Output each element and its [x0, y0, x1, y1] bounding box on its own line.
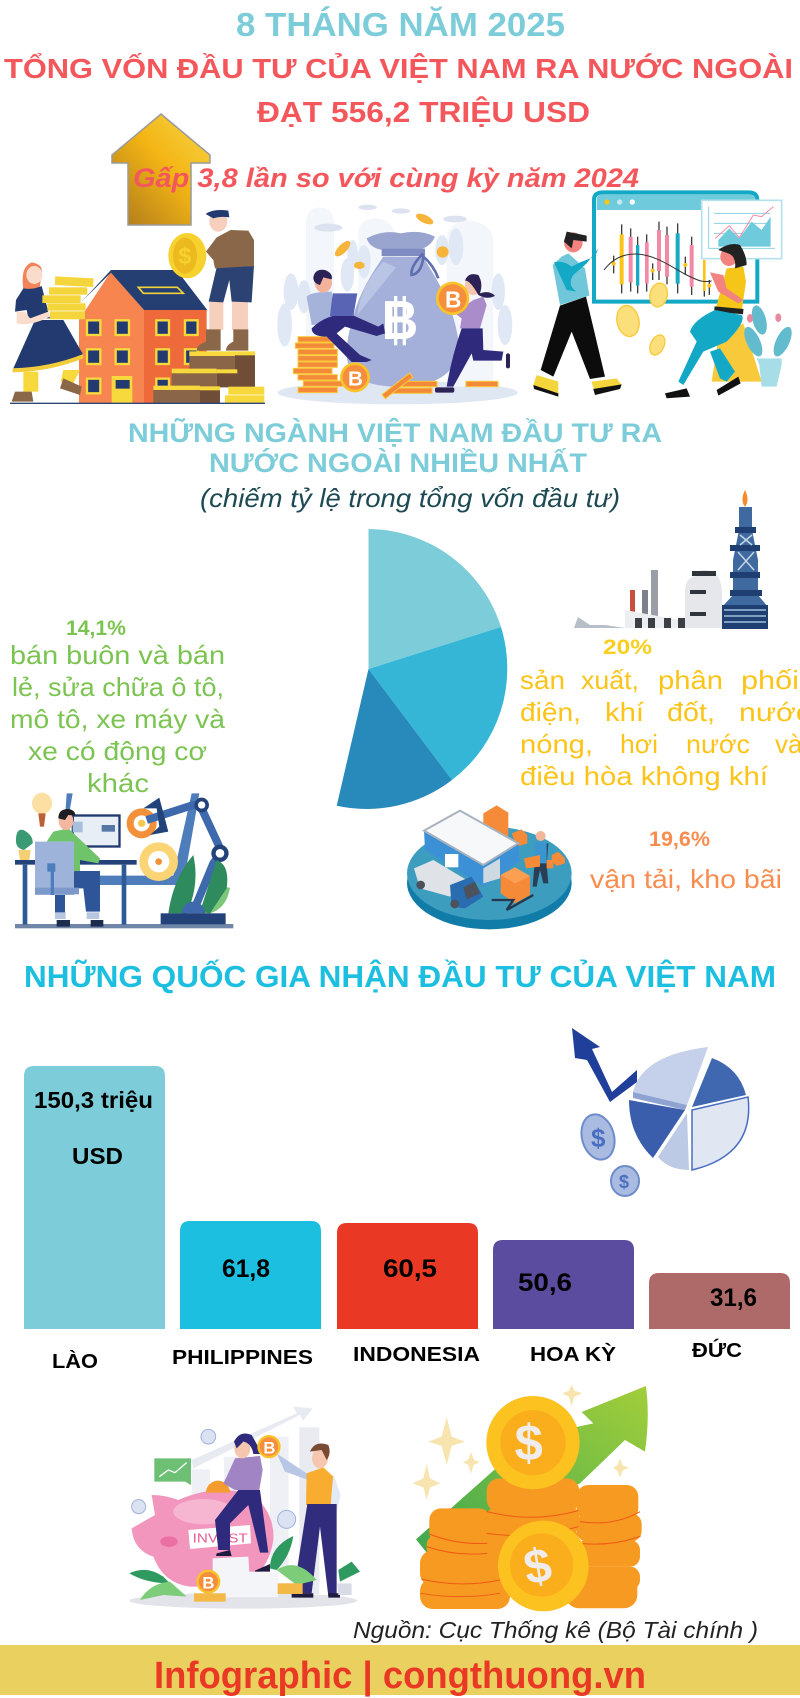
bar: Lào: USD [72, 1143, 123, 1169]
illustration: refinery and oil rig [574, 490, 768, 629]
icon: pie chart with arrow and coins: $ [619, 1172, 629, 1192]
bar: Indonesia [337, 1223, 480, 1366]
bar: Philippines [172, 1221, 321, 1369]
callout: electricity and gas 20%: sản [520, 665, 565, 695]
illustration: bitcoin money bag: B [445, 286, 461, 312]
bar: Hoa Kỳ: 50,6 [518, 1269, 572, 1297]
callout: electricity and gas 20% [520, 636, 800, 791]
callout: trade and vehicle repair 14,1%: lẻ, sửa chữa ô tô, [12, 672, 224, 702]
bar: Hoa Kỳ [493, 1240, 634, 1366]
callout: trade and vehicle repair 14,1%: mô tô, xe máy và [10, 704, 226, 734]
title: main line: TỔNG VỐN ĐẦU TƯ CỦA VIỆT NAM RA NƯỚC NGOÀI [4, 52, 793, 84]
callout: trade and vehicle repair 14,1%: bán buôn và bán [10, 640, 225, 670]
title: total value: ĐẠT 556,2 TRIỆU USD [257, 95, 590, 129]
bar: Philippines: PHILIPPINES [172, 1347, 313, 1369]
bar: Đức: 31,6 [710, 1284, 757, 1312]
illustration: people and candlestick chart [533, 192, 795, 398]
section heading: industries [128, 417, 662, 513]
illustration: house and coins: $ [178, 243, 191, 269]
illustration: bitcoin money bag: B [348, 367, 363, 390]
heading line two: NƯỚC NGOÀI NHIỀU NHẤT [209, 447, 588, 478]
callout: trade and vehicle repair 14,1%: khác [87, 768, 149, 798]
callout: electricity and gas 20%: xuất, [581, 665, 639, 695]
callout: trade and vehicle repair 14,1%: xe có động cơ [28, 736, 207, 766]
callout: electricity and gas 20%: khí [605, 697, 645, 727]
illustration: gold coin stacks and green arrow: $ [515, 1414, 543, 1471]
title: period: 8 THÁNG NĂM 2025 [236, 6, 565, 43]
callout: trade and vehicle repair 14,1%: 14,1% [66, 617, 126, 640]
illustration: gold coin stacks and green arrow [413, 1385, 648, 1611]
callout: electricity and gas 20%: phân [658, 665, 723, 695]
bar: Indonesia: INDONESIA [353, 1344, 480, 1366]
callout: electricity and gas 20%: nước [686, 729, 750, 759]
bar: Đức [649, 1273, 790, 1362]
callout: electricity and gas 20%: phối [741, 665, 799, 695]
bar: Lào [24, 1066, 165, 1373]
callout: transport and warehousing 19,6% [590, 828, 782, 894]
bar: Lào: LÀO [52, 1350, 98, 1373]
callout: electricity and gas 20%: điều hòa không khí [520, 761, 769, 791]
bar chart: countries [24, 1066, 790, 1373]
illustration: piggy bank investment [129, 1407, 360, 1609]
bar: Indonesia: 60,5 [383, 1255, 437, 1283]
illustration: bitcoin money bag [277, 205, 518, 404]
icon: pie chart with arrow and coins: $ [591, 1123, 606, 1153]
callout: electricity and gas 20%: điện, [520, 697, 581, 727]
illustration: piggy bank investment: B [202, 1574, 214, 1593]
title block [4, 6, 793, 193]
footer band [0, 1645, 800, 1697]
icon: pie chart with arrow and coins [572, 1028, 749, 1196]
bar: Hoa Kỳ: HOA KỲ [530, 1342, 617, 1366]
bar: Đức: ĐỨC [692, 1338, 742, 1362]
illustration: piggy bank investment: INVEST [193, 1531, 248, 1545]
illustration: gold coin stacks and green arrow: $ [520, 1538, 556, 1596]
illustration: house and coins [10, 210, 265, 404]
source note: Nguồn: Cục Thống kê (Bộ Tài chính ) [353, 1617, 758, 1643]
callout: transport and warehousing 19,6%: 19,6% [649, 828, 710, 851]
callout: electricity and gas 20%: đốt, [667, 697, 715, 727]
illustration: warehouse logistics platform [407, 805, 572, 929]
heading note: (chiếm tỷ lệ trong tổng vốn đầu tư) [200, 483, 620, 513]
heading line one: NHỮNG NGÀNH VIỆT NAM ĐẦU TƯ RA [128, 417, 662, 448]
bar: Lào: 150,3 triệu [34, 1087, 153, 1113]
illustration: piggy bank investment: B [263, 1438, 275, 1457]
icon: gold up arrow [112, 114, 210, 225]
callout: transport and warehousing 19,6%: vận tải, kho bãi [590, 864, 782, 894]
subtitle: comparison: Gấp 3,8 lần so với cùng kỳ năm 2024 [133, 163, 639, 193]
illustration: engineer and robot arm [15, 793, 233, 928]
bar: Philippines: 61,8 [222, 1255, 270, 1283]
callout: electricity and gas 20%: 20% [603, 636, 652, 659]
footer brand text: Infographic | congthuong.vn [154, 1655, 646, 1697]
callout: electricity and gas 20%: nước [739, 697, 800, 727]
section heading: recipient countries: NHỮNG QUỐC GIA NHẬN ĐẦU TƯ CỦA VIỆT NAM [24, 958, 776, 994]
illustration: bitcoin money bag: B [382, 289, 418, 351]
callout: trade and vehicle repair 14,1% [10, 617, 226, 798]
callout: electricity and gas 20%: hơi [620, 729, 658, 759]
callout: electricity and gas 20%: nóng, [520, 729, 593, 759]
pie chart [337, 529, 507, 809]
